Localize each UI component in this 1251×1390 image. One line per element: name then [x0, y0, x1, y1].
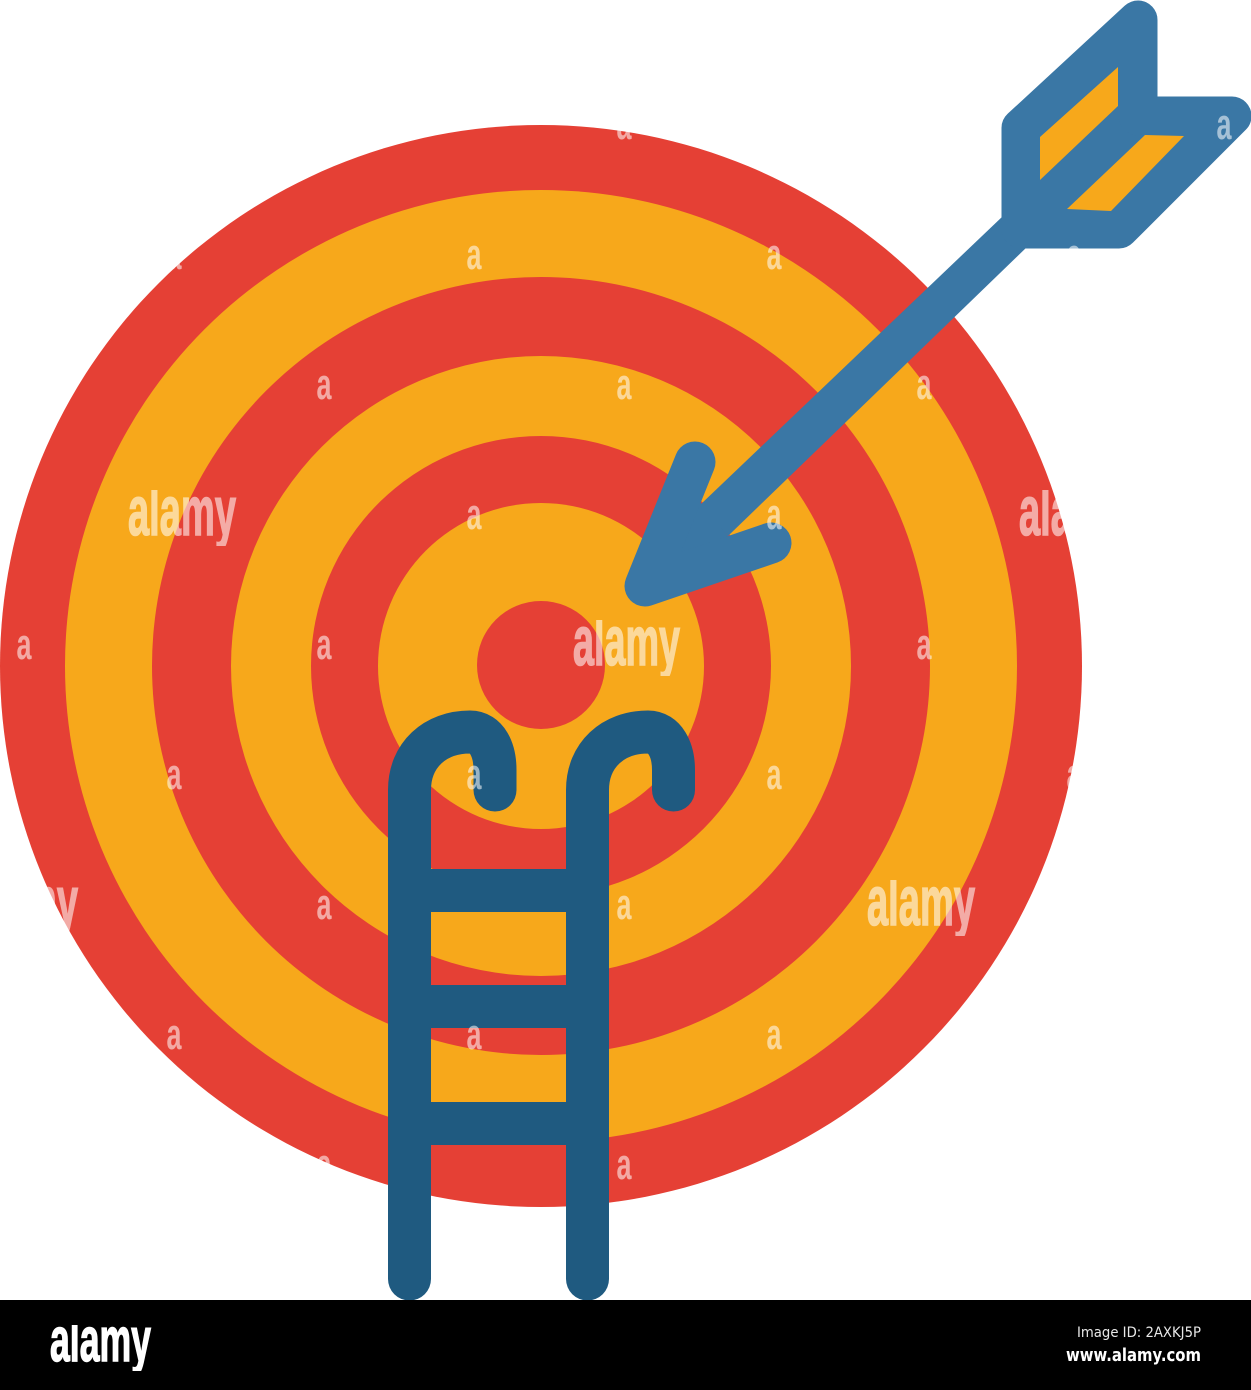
watermark: small a marks: a: [616, 360, 632, 409]
ladder: [410, 732, 674, 1279]
watermark: small a marks: a: [766, 490, 782, 539]
arrow shaft: [700, 216, 1028, 536]
watermark: small a marks: a: [616, 100, 632, 149]
watermark: small a marks: a: [766, 230, 782, 279]
watermark: small a marks: a: [466, 750, 482, 799]
watermark: small a marks: a: [1066, 230, 1082, 279]
footer website: www.alamy.com: [1066, 1345, 1201, 1366]
watermark: small a marks: a: [916, 620, 932, 669]
watermark: large alamy marks: alamy: [1019, 472, 1127, 550]
fletching stripe lower: [1067, 135, 1184, 211]
ladder left rail with hook: [410, 732, 495, 1279]
watermark: small a marks: a: [1216, 100, 1232, 149]
footer bar: [0, 1300, 1251, 1390]
ladder right rail with hook: [588, 732, 674, 1279]
watermark: small a marks: a: [16, 620, 32, 669]
watermark: large alamy marks: alamy: [573, 602, 680, 680]
watermark: small a marks: a: [316, 360, 332, 409]
watermark: small a marks: a: [166, 750, 182, 799]
watermark: small a marks: a: [466, 490, 482, 539]
arrow head: [645, 462, 771, 586]
watermark: small a marks: a: [466, 230, 482, 279]
fletching stripe upper: [1040, 67, 1118, 180]
footer logo: alamy: [50, 1306, 151, 1375]
watermark: small a marks: a: [316, 880, 332, 929]
watermark: small a marks: a: [316, 620, 332, 669]
watermark: small a marks: [16, 100, 1232, 1189]
watermark: small a marks: a: [316, 1140, 332, 1189]
watermark: small a marks: a: [1066, 750, 1082, 799]
watermark: small a marks: a: [166, 230, 182, 279]
watermark: large alamy marks: [47, 490, 1066, 936]
target: concentric rings: [0, 125, 1082, 1207]
ladder rungs: [420, 890, 577, 1124]
watermark: small a marks: a: [166, 1010, 182, 1059]
watermark: large alamy marks: alamy: [867, 862, 975, 940]
watermark: large alamy marks: alamy: [128, 472, 236, 550]
watermark: small a marks: a: [616, 880, 632, 929]
watermark: small a marks: a: [616, 1140, 632, 1189]
watermark: small a marks: a: [766, 750, 782, 799]
watermark: small a marks: a: [466, 1010, 482, 1059]
watermark: small a marks: a: [916, 360, 932, 409]
watermark: small a marks: a: [766, 1010, 782, 1059]
arrow: [645, 20, 1232, 586]
arrow fletching: [1021, 20, 1232, 229]
footer image id: Image ID: 2AXKJ5P: [1077, 1325, 1201, 1341]
